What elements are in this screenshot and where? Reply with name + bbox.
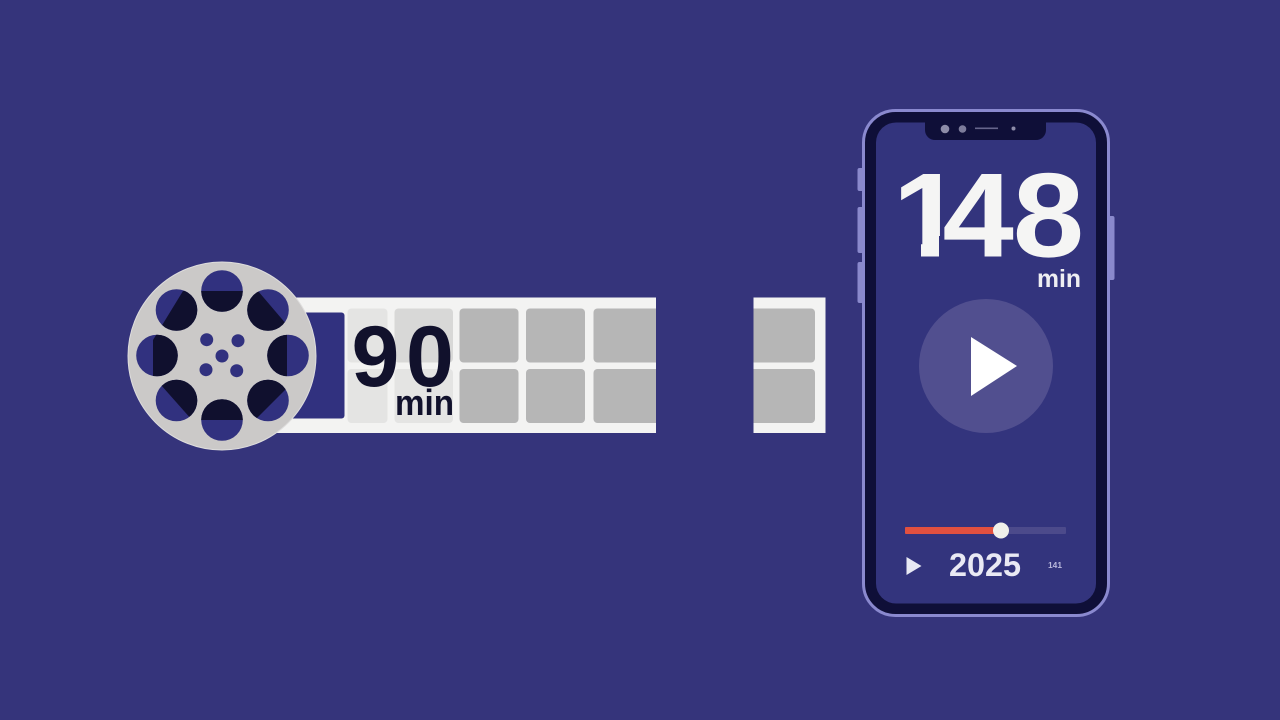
blue frame <box>280 312 344 418</box>
progress track <box>905 527 1066 534</box>
light frames <box>348 308 453 423</box>
screen <box>876 122 1096 604</box>
strip body left <box>270 298 656 433</box>
year: 2025 <box>949 547 1021 583</box>
notch <box>925 120 1046 140</box>
label: 90 min <box>352 309 454 423</box>
number 90: 90 <box>352 309 454 405</box>
phone body <box>864 110 1108 616</box>
unit min: min <box>1037 265 1081 293</box>
film strip <box>270 298 826 433</box>
side buttons <box>858 168 1114 303</box>
number 148: 148 <box>892 149 1084 283</box>
reel disc <box>128 262 316 450</box>
progress thumb <box>993 522 1009 538</box>
reel holes <box>136 270 309 441</box>
camera and speaker <box>941 125 1016 133</box>
small controls: 141 <box>1048 561 1063 570</box>
hub dots <box>200 333 244 377</box>
play button circle <box>919 299 1053 433</box>
progress fill <box>905 527 1001 534</box>
strip body right fragment <box>754 298 826 433</box>
small play icon <box>906 557 922 575</box>
phone <box>858 110 1114 616</box>
unit min: min <box>395 382 454 423</box>
grey frames <box>460 308 815 423</box>
film reel <box>128 262 316 450</box>
masks trimming the foot of the digit 1 <box>888 236 978 262</box>
play triangle <box>971 337 1017 396</box>
